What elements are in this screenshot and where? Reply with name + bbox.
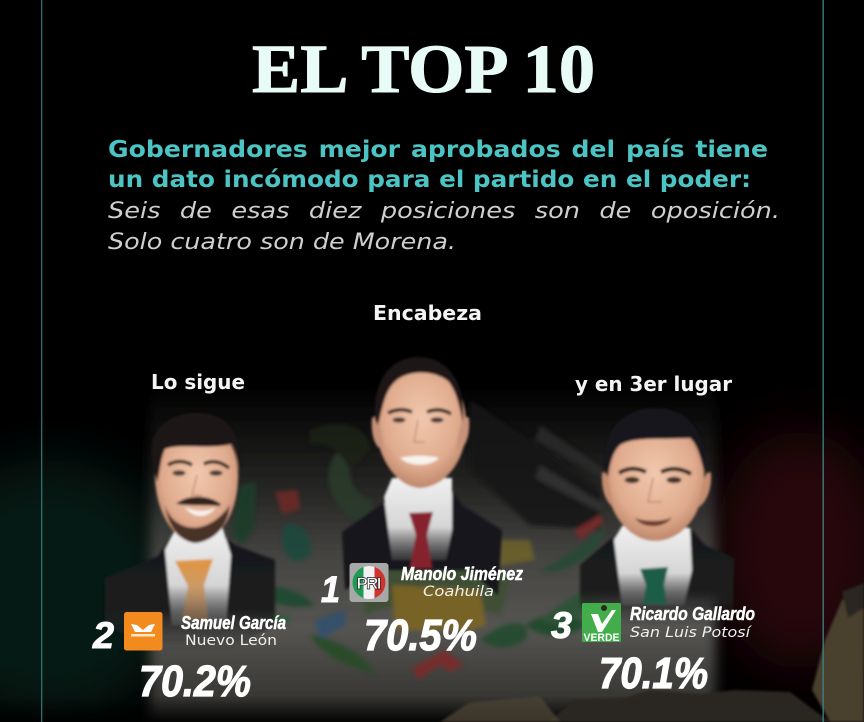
rank number 2: 2 (92, 615, 114, 656)
candidate 1: Manolo Jiménez (321, 563, 523, 660)
terrain relief map at bottom (440, 583, 864, 722)
portrait: Ricardo Gallardo (580, 408, 734, 625)
icon: Movimiento Ciudadano logo (124, 612, 162, 650)
portrait: Manolo Jiménez (342, 357, 502, 595)
icon: Partido Verde logo (582, 603, 621, 644)
icon: PRI logo: PRI (356, 574, 382, 593)
flag emblem: eagle and nopal (232, 400, 610, 680)
heading: Encabeza: Encabeza (373, 301, 482, 325)
heading: Lo sigue: Lo sigue (151, 370, 245, 394)
intro text block: Seis de esas diez posiciones son de oposición. (108, 198, 780, 224)
intro text block: Gobernadores mejor aprobados del país tiene (108, 135, 768, 163)
name and state: Manolo Jiménez (401, 564, 523, 584)
percent 70.5%: 70.5% (364, 611, 477, 660)
title: EL TOP 10 (252, 31, 595, 107)
heading: y en 3er lugar: y en 3er lugar (575, 372, 732, 396)
name and state (630, 604, 755, 641)
intro text block: Solo cuatro son de Morena. (108, 229, 456, 255)
name and state: Samuel García (181, 613, 286, 633)
candidate 3: Ricardo Gallardo (551, 603, 755, 698)
name and state: Ricardo Gallardo (630, 604, 755, 624)
percent 70.2%: 70.2% (139, 657, 251, 706)
name and state (401, 564, 523, 600)
portrait: Samuel García (105, 413, 275, 650)
rank number 1: 1 (321, 569, 340, 610)
name and state (181, 613, 286, 649)
icon: PRI logo (350, 563, 388, 602)
intro text block (108, 135, 780, 255)
icon: Partido Verde logo: VERDE (584, 632, 620, 644)
rank number 3: 3 (551, 605, 572, 646)
intro text block: un dato incómodo para el partido en el poder: (108, 165, 751, 193)
percent 70.1%: 70.1% (599, 649, 708, 698)
name and state: Coahuila (423, 584, 494, 600)
name and state: Nuevo León (185, 633, 277, 649)
candidate 2: Samuel García (92, 612, 286, 706)
name and state: San Luis Potosí (630, 625, 752, 641)
